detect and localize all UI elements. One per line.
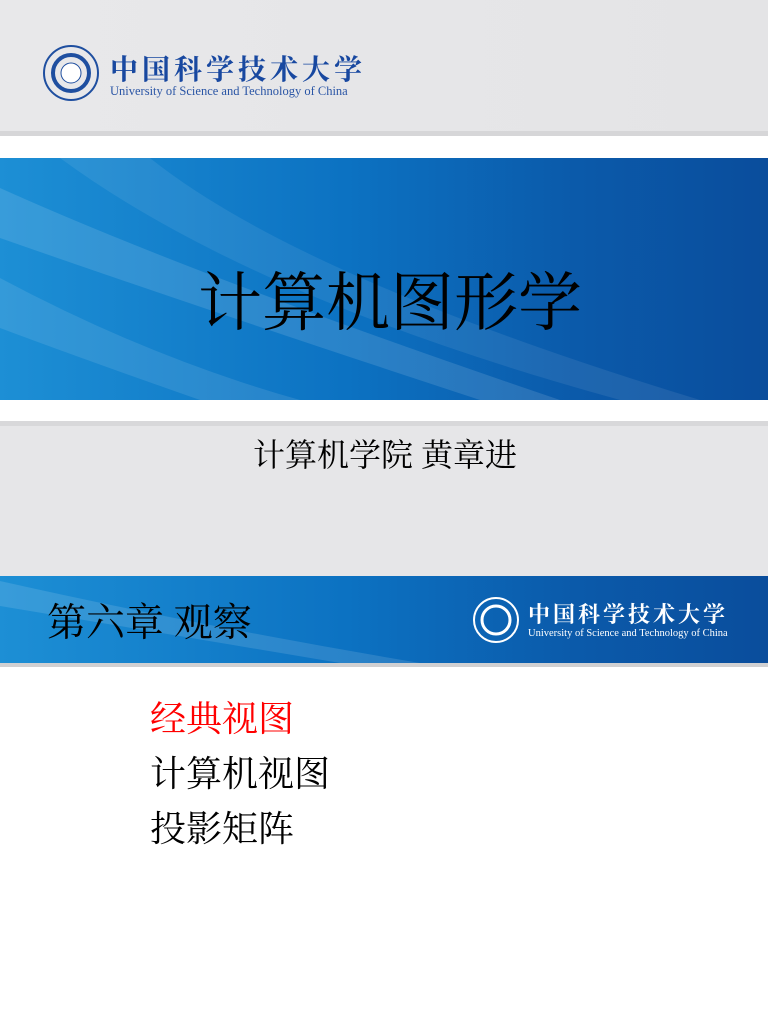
top logo bbox=[43, 45, 366, 101]
chapter title: 第六章 观察 bbox=[47, 602, 252, 645]
icon: emblem bbox=[43, 45, 99, 101]
title: 计算机图形学 bbox=[198, 268, 582, 339]
outline list bbox=[150, 699, 330, 849]
title banner bbox=[0, 158, 768, 400]
bar logo: University of Science and Technology of China bbox=[528, 628, 728, 639]
author panel bbox=[0, 426, 768, 576]
chapter bar bbox=[0, 576, 768, 663]
item: computer view: 计算机视图 bbox=[150, 754, 330, 794]
bar logo: 中国科学技术大学 bbox=[528, 598, 728, 629]
logo english name: University of Science and Technology of China bbox=[110, 84, 348, 98]
author text: 计算机学院 黄章进 bbox=[253, 437, 517, 473]
logo chinese name: 中国科学技术大学 bbox=[110, 48, 366, 88]
top header gray bbox=[0, 0, 768, 131]
bar logo bbox=[473, 597, 728, 643]
item: classic view: 经典视图 bbox=[150, 699, 294, 739]
item: projection matrix: 投影矩阵 bbox=[150, 809, 294, 849]
